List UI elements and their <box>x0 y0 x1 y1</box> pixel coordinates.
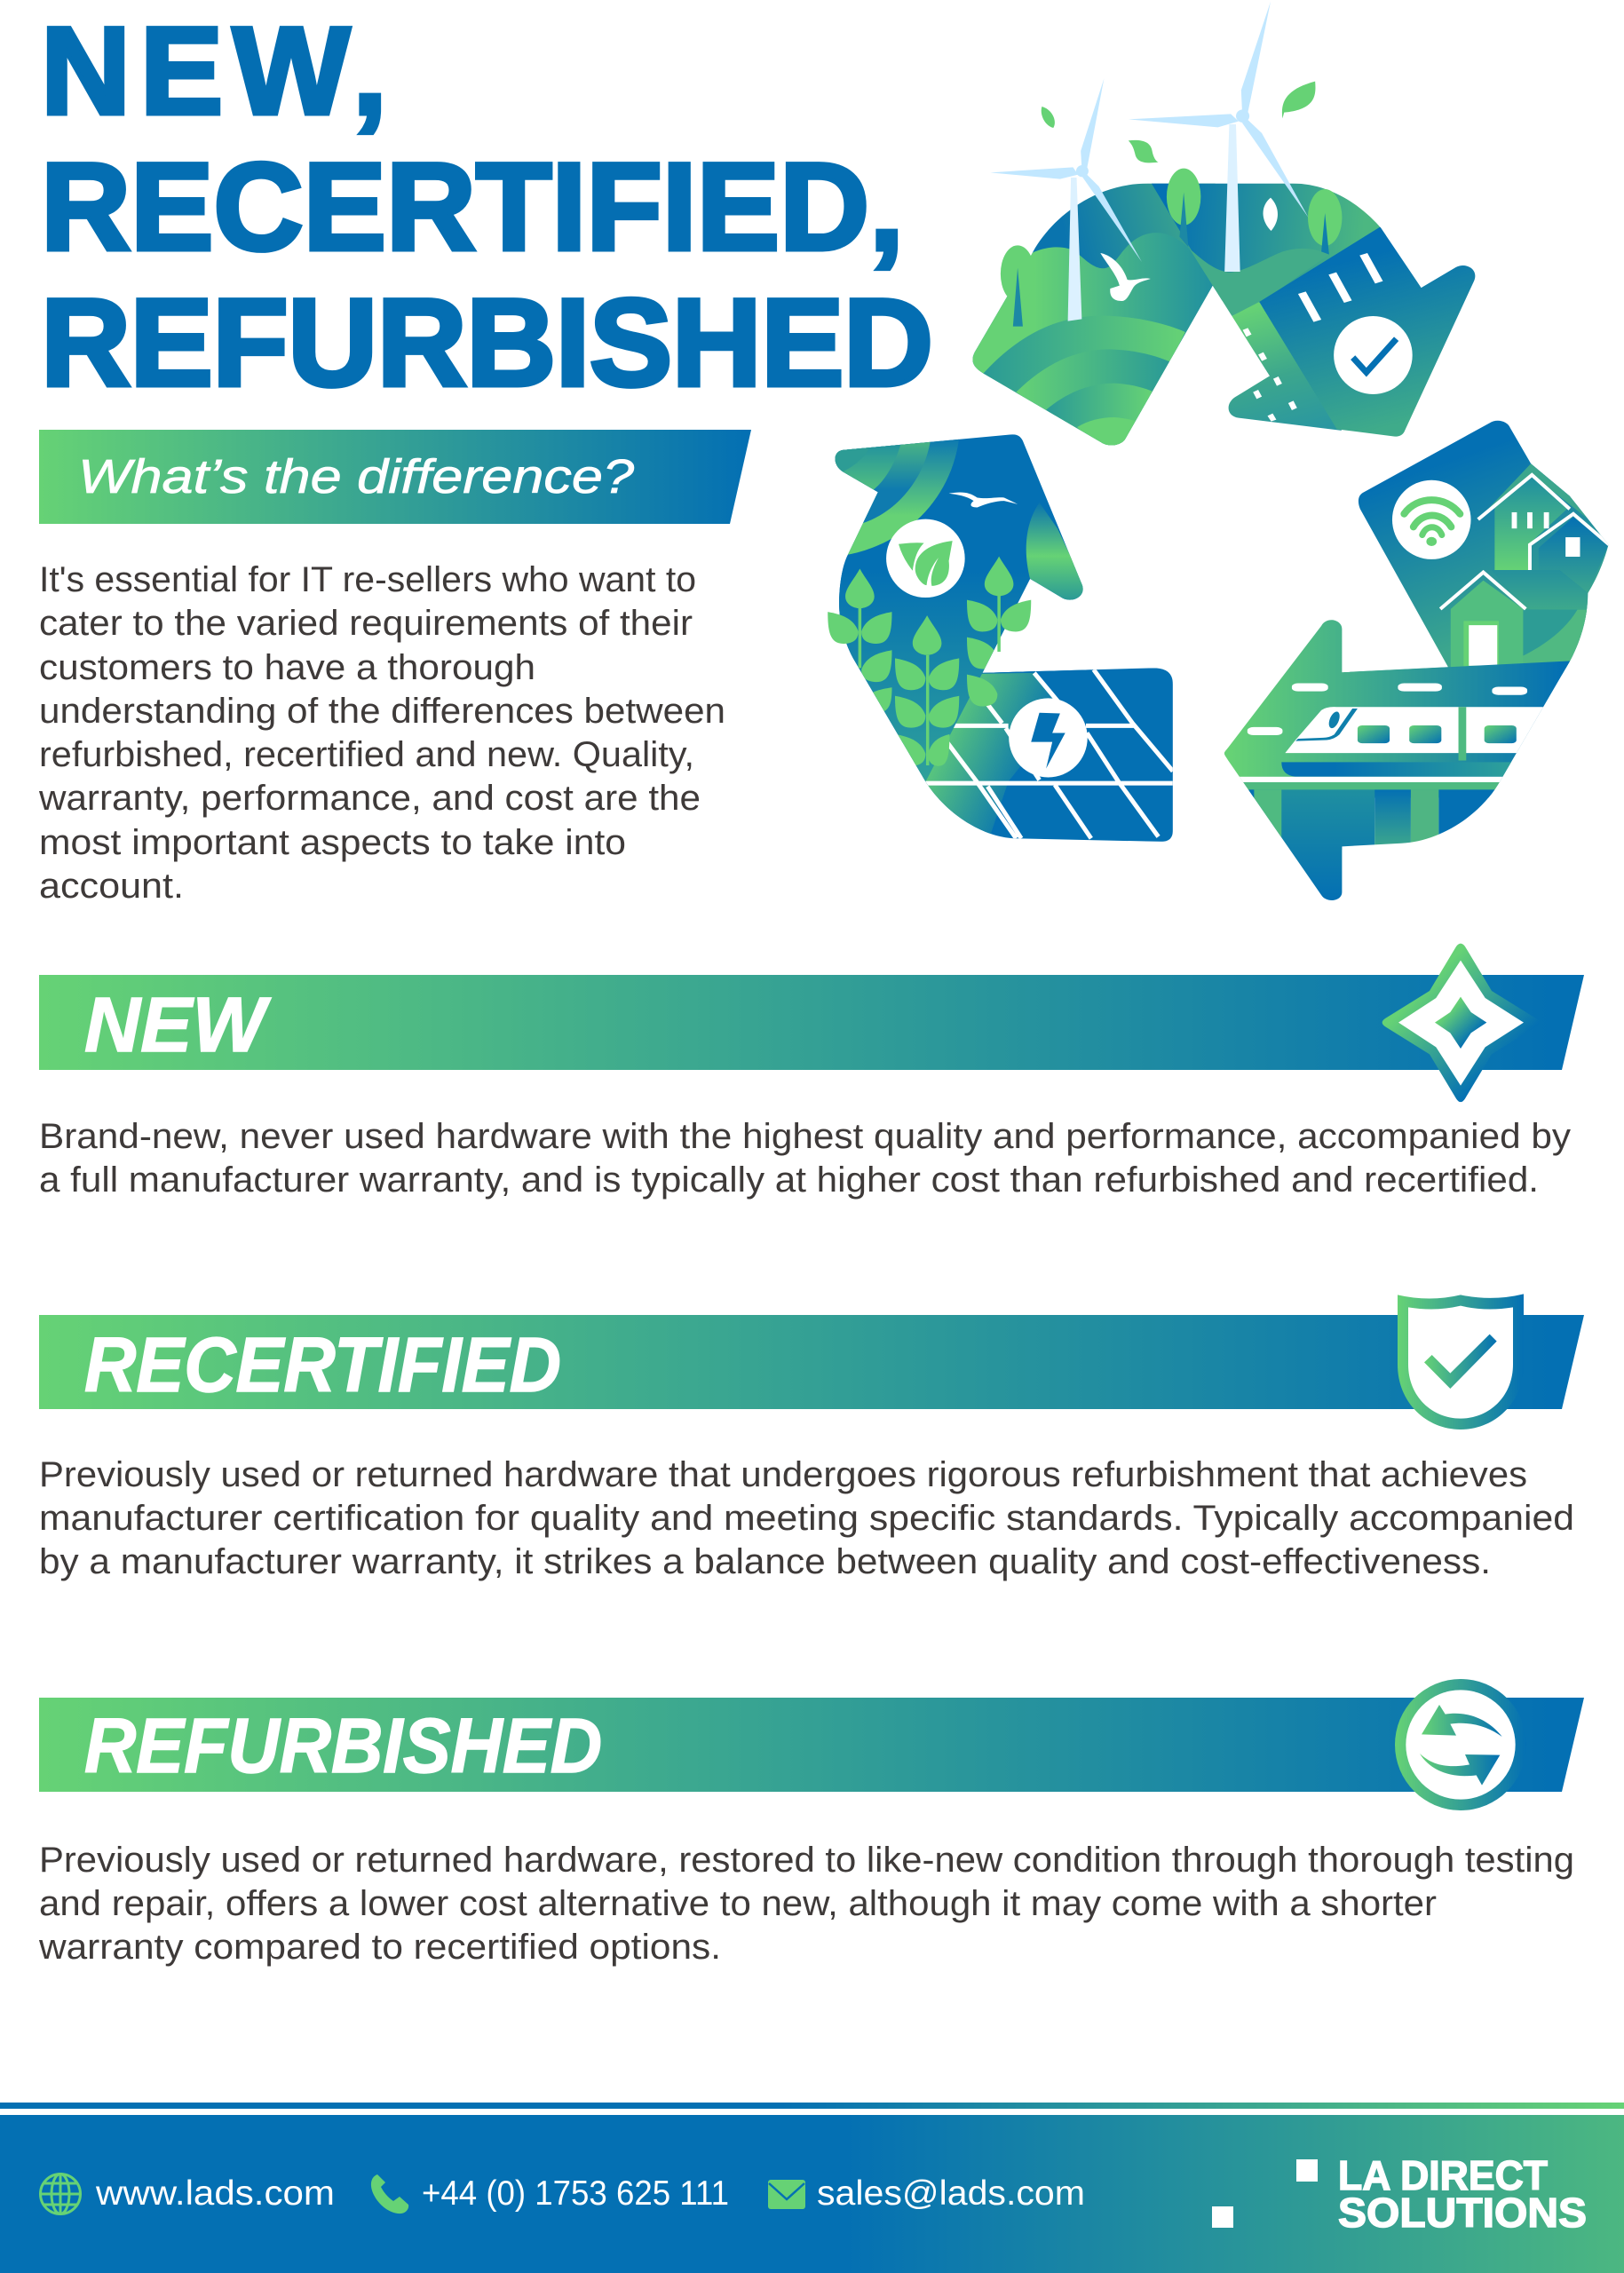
description: refurbished: and repair, offers a lower cost alternative to new, although it may come with a shorter <box>39 1884 1437 1923</box>
description: recertified: manufacturer certification for quality and meeting specific standards. Typically accompanied <box>39 1499 1574 1538</box>
description: new: a full manufacturer warranty, and is typically at higher cost than refurbished and recertified. <box>39 1160 1539 1200</box>
section heading: recertified: RECERTIFIED <box>84 1322 561 1408</box>
description: recertified <box>39 1455 1574 1581</box>
intro paragraph: cater to the varied requirements of their <box>39 604 693 643</box>
title <box>41 1 933 412</box>
house back sliver <box>1488 463 1588 519</box>
phone number: +44 (0) 1753 625 111 <box>422 2174 729 2213</box>
arrow: left with plants and solar panel <box>828 428 1174 843</box>
section bar: new <box>39 975 1584 1070</box>
bird and white leaf <box>1100 198 1278 301</box>
intro paragraph: refurbished, recertified and new. Quality, <box>39 735 694 774</box>
subtitle ribbon <box>39 430 751 524</box>
section bar: refurbished <box>39 1698 1584 1792</box>
road <box>1221 616 1578 798</box>
title: REFURBISHED <box>41 273 933 412</box>
description: refurbished <box>38 1841 1574 1967</box>
icon: leaf circle <box>886 519 965 598</box>
logo: LA Direct Solutions: SOLUTIONS <box>1338 2190 1587 2236</box>
section heading: refurbished: REFURBISHED <box>84 1703 602 1789</box>
section: refurbished <box>38 1679 1584 1967</box>
floating leaves <box>1042 82 1315 162</box>
house two <box>1440 570 1593 668</box>
section: new <box>39 944 1584 1200</box>
intro paragraph: warranty, performance, and cost are the <box>38 779 701 818</box>
intro paragraph: It's essential for IT re-sellers who want to <box>39 560 696 599</box>
wind turbines <box>990 2 1309 321</box>
icon: four point star <box>1382 944 1539 1102</box>
logo: LA Direct Solutions: LA DIRECT <box>1338 2152 1548 2198</box>
website: www.lads.com <box>95 2174 335 2213</box>
intro paragraph <box>38 560 725 906</box>
icon: wifi circle <box>1392 480 1471 559</box>
icon: shield check <box>1398 1294 1524 1430</box>
recycling symbol illustration <box>828 2 1613 905</box>
footer <box>0 2103 1624 2273</box>
section: recertified <box>39 1294 1584 1581</box>
intro paragraph: understanding of the differences between <box>39 692 725 731</box>
description: recertified: by a manufacturer warranty, it strikes a balance between quality and cost-effectiveness. <box>39 1542 1491 1581</box>
icon: check circle <box>1334 316 1413 394</box>
icon: exchange arrows <box>1395 1679 1526 1810</box>
arrow: top with hills and wind turbines <box>962 2 1485 450</box>
white roof strips <box>1243 253 1382 422</box>
intro paragraph: account. <box>39 867 184 906</box>
intro paragraph: customers to have a thorough <box>39 648 535 687</box>
title: NEW, <box>41 1 387 140</box>
intro paragraph: most important aspects to take into <box>39 823 626 862</box>
icon: mail <box>768 2180 805 2209</box>
icon: phone <box>371 2174 408 2214</box>
trees <box>1001 169 1342 327</box>
bird <box>949 492 1018 507</box>
viaduct <box>1240 776 1502 900</box>
subtitle ribbon: What’s the difference? <box>78 450 634 503</box>
icon: globe <box>41 2174 80 2214</box>
description: refurbished: warranty compared to recertified options. <box>38 1928 721 1967</box>
plants <box>828 557 1031 766</box>
icon: lightning circle <box>1009 698 1088 778</box>
house one <box>1478 475 1611 593</box>
description: new <box>39 1117 1571 1200</box>
description: recertified: Previously used or returned hardware that undergoes rigorous refurbishment that achieves <box>39 1455 1527 1494</box>
description: refurbished: Previously used or returned hardware, restored to like-new condition through thorough testing <box>39 1841 1574 1880</box>
section bar: recertified <box>39 1315 1584 1409</box>
arrow: right with houses and train <box>1221 415 1613 905</box>
logo: LA Direct Solutions <box>1212 2152 1587 2236</box>
title: RECERTIFIED, <box>41 137 904 276</box>
description: new: Brand-new, never used hardware with the highest quality and performance, accompanied by <box>39 1117 1571 1156</box>
train <box>1281 707 1551 777</box>
email: sales@lads.com <box>817 2174 1085 2213</box>
section heading: new: NEW <box>84 982 272 1068</box>
solar panel <box>921 665 1174 843</box>
